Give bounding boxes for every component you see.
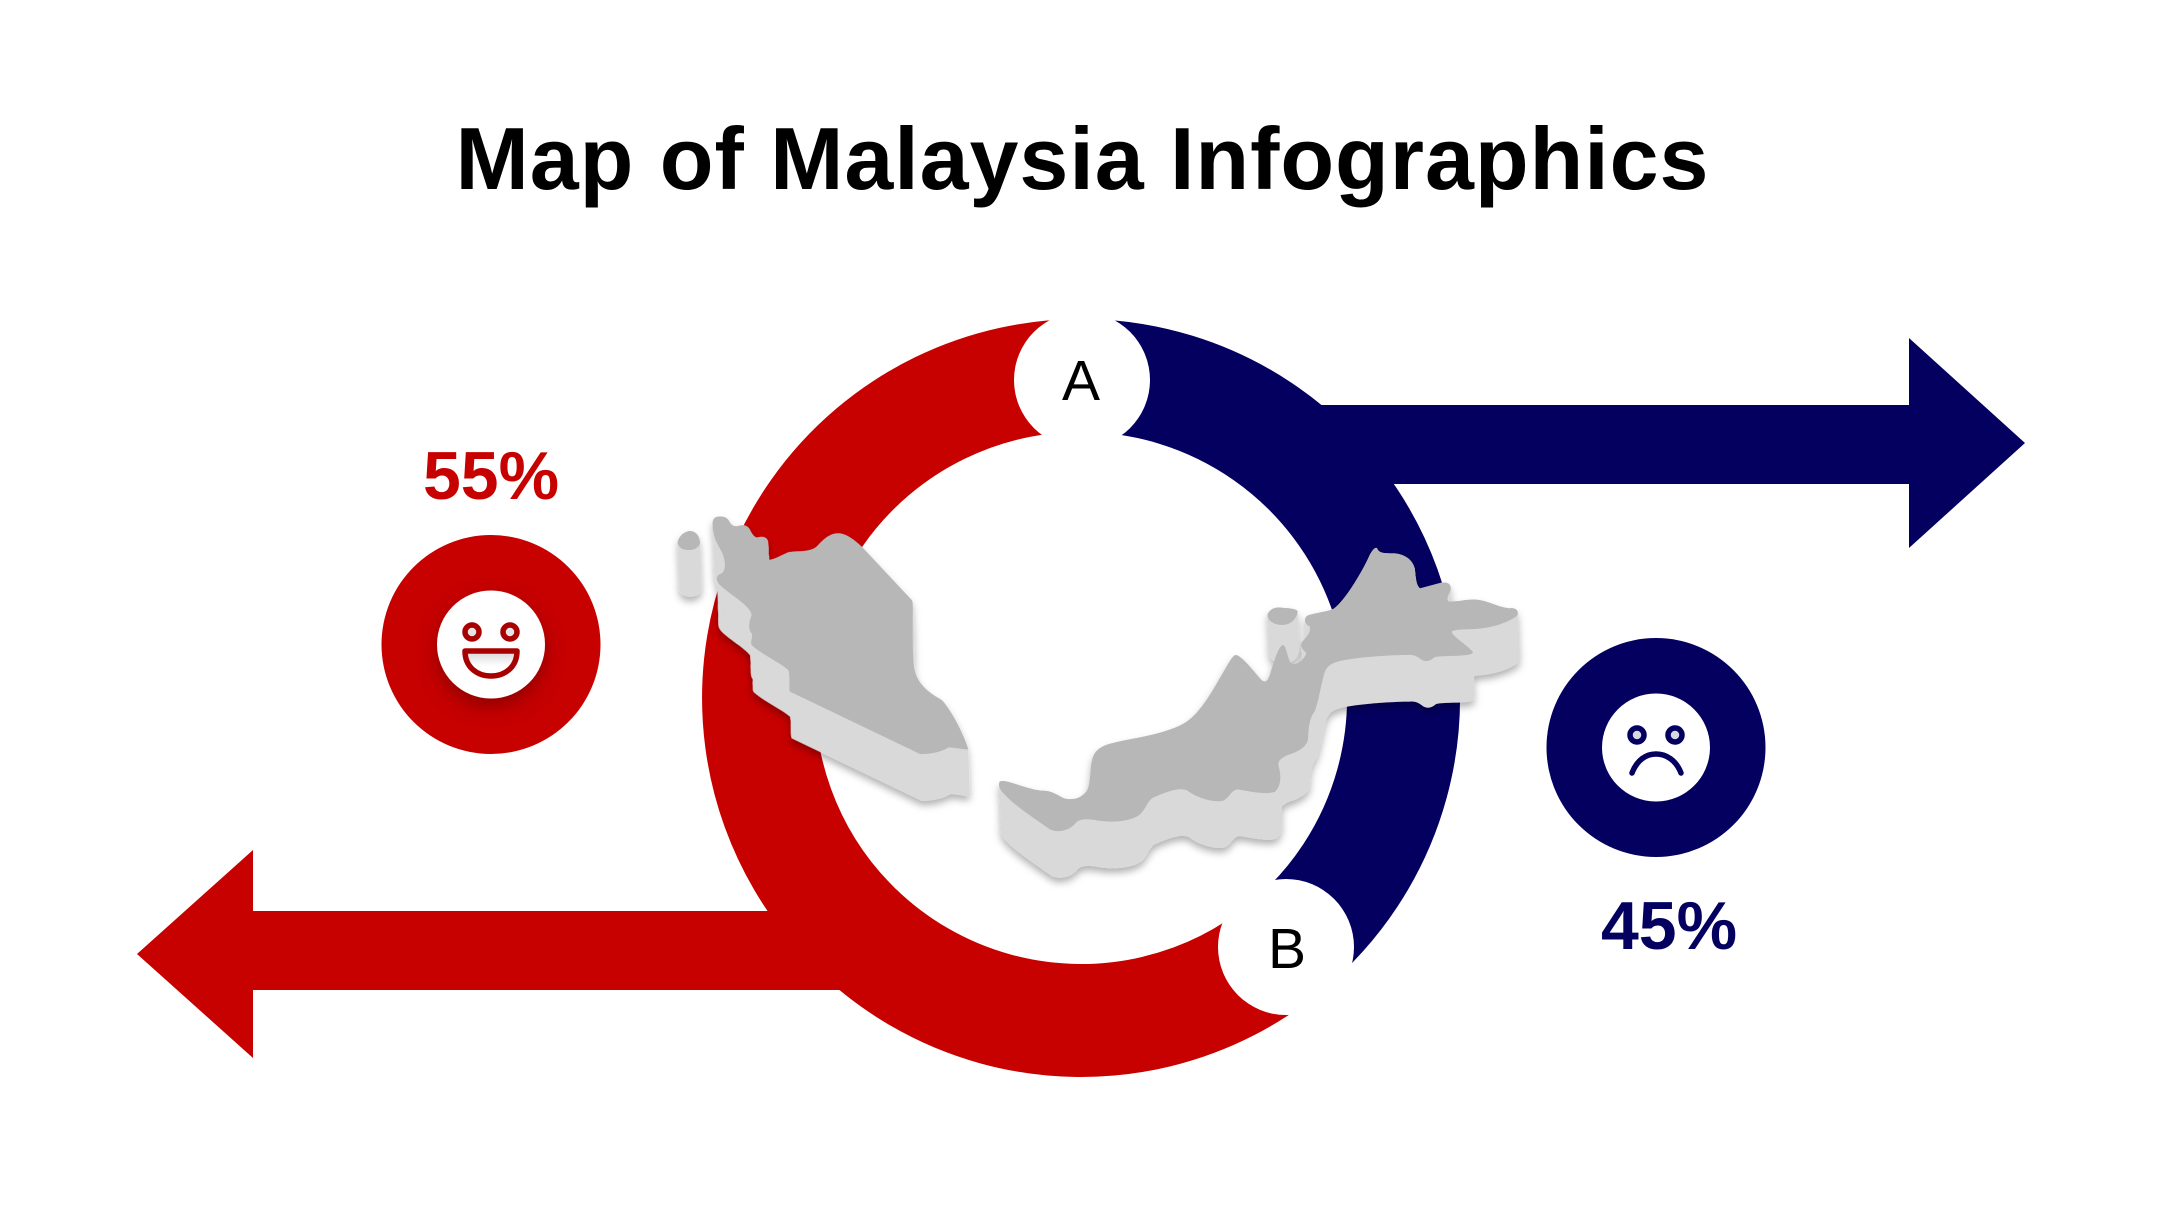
map of peninsular Malaysia <box>678 517 970 801</box>
icon: happy face <box>382 535 600 754</box>
sad stat: 45%: 45% <box>1601 888 1737 964</box>
icon: sad face <box>1546 638 1766 857</box>
right navy arrow <box>1300 338 2025 548</box>
left red arrow <box>137 850 860 1058</box>
badge B <box>1218 879 1354 1015</box>
badge A <box>1014 312 1150 448</box>
title: Map of Malaysia Infographics <box>456 109 1708 208</box>
ring: navy half <box>1080 375 1404 947</box>
badge A: A <box>1062 349 1100 413</box>
map of east Malaysia (Borneo) <box>999 548 1520 878</box>
happy stat: 55%: 55% <box>423 438 559 514</box>
ring: red half <box>759 376 1286 1020</box>
badge B: B <box>1268 917 1306 981</box>
